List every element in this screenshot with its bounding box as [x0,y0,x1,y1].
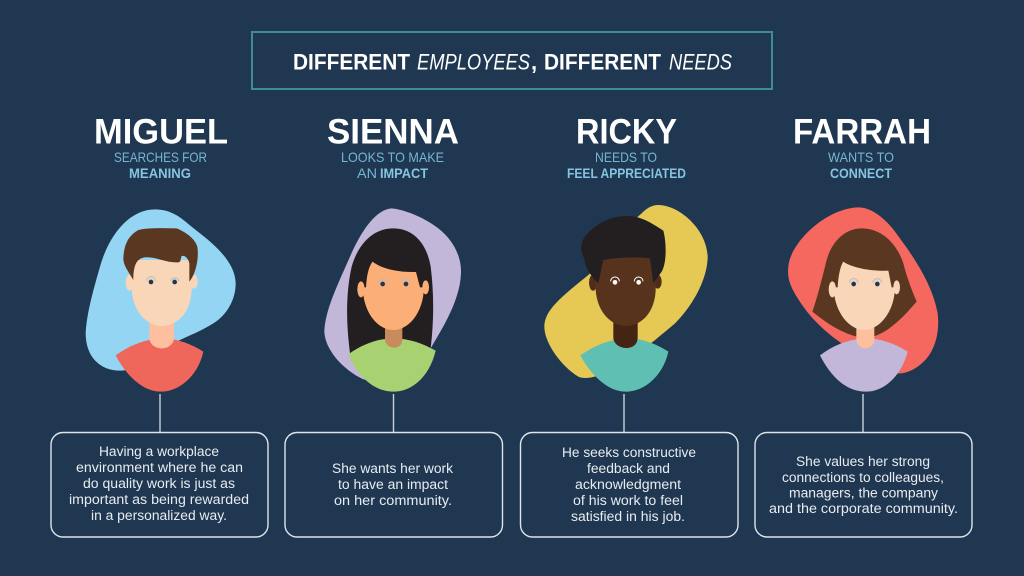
text box: Miguel: do quality work is just as [83,476,235,491]
subheading: searches for meaning: SEARCHES FOR [114,149,207,165]
subheading: needs to feel appreciated: FEEL APPRECIATED [567,165,686,181]
subheading: searches for meaning: MEANING [129,165,191,181]
subheading: looks to make an impact [341,149,444,181]
text box: Ricky: of his work to feel [573,493,683,508]
title: NEEDS [669,50,732,74]
text box: Miguel: in a personalized way. [91,508,227,523]
subheading: looks to make an impact: IMPACT [380,165,428,181]
title: EMPLOYEES [417,50,530,74]
text box: Farrah [755,432,972,537]
text box: Farrah: She values her strong [796,454,930,469]
text box: Sienna: to have an impact [338,477,448,492]
text box: Farrah: and the corporate community. [769,501,958,516]
text box: Miguel [51,432,268,537]
icon: Farrah portrait [788,207,938,392]
subheading: looks to make an impact: LOOKS TO MAKE [341,149,444,165]
text box: Farrah: connections to colleagues, [782,470,944,485]
title: DIFFERENT [544,50,662,74]
text box: Miguel: Having a workplace [99,444,219,459]
text box: Sienna: She wants her work [332,461,453,476]
title [252,32,772,89]
icon: Miguel portrait [86,209,236,392]
text box: Ricky: satisfied in his job. [571,509,685,524]
panel: Farrah [755,112,972,537]
title: DIFFERENT [293,50,411,74]
subheading: needs to feel appreciated: NEEDS TO [595,149,657,165]
subheading: wants to connect: WANTS TO [828,149,894,165]
heading: Ricky: RICKY [576,112,677,152]
subheading: wants to connect: CONNECT [830,165,892,181]
title: , [531,50,537,74]
text box: Miguel: environment where he can [76,460,243,475]
icon: Ricky portrait [544,205,708,392]
heading: Sienna: SIENNA [327,112,459,152]
subheading: searches for meaning [114,149,207,181]
text box: Ricky [520,432,738,537]
text box: Miguel: important as being rewarded [69,492,249,507]
text box: Sienna: on her community. [334,493,452,508]
subheading: looks to make an impact: AN [357,165,377,181]
panel: Sienna [285,112,502,537]
text box: Farrah: managers, the company [789,486,938,500]
subheading: wants to connect [828,149,894,181]
panel: Miguel [51,112,268,537]
text box: Ricky: He seeks constructive [562,445,696,460]
heading: Farrah: FARRAH [793,112,931,152]
icon: Sienna portrait [324,208,461,392]
panel: Ricky [520,112,738,537]
heading: Miguel: MIGUEL [94,112,228,152]
subheading: needs to feel appreciated [567,149,686,181]
text box: Sienna [285,432,502,537]
text box: Ricky: acknowledgment [575,477,681,492]
text box: Ricky: feedback and [587,461,670,476]
